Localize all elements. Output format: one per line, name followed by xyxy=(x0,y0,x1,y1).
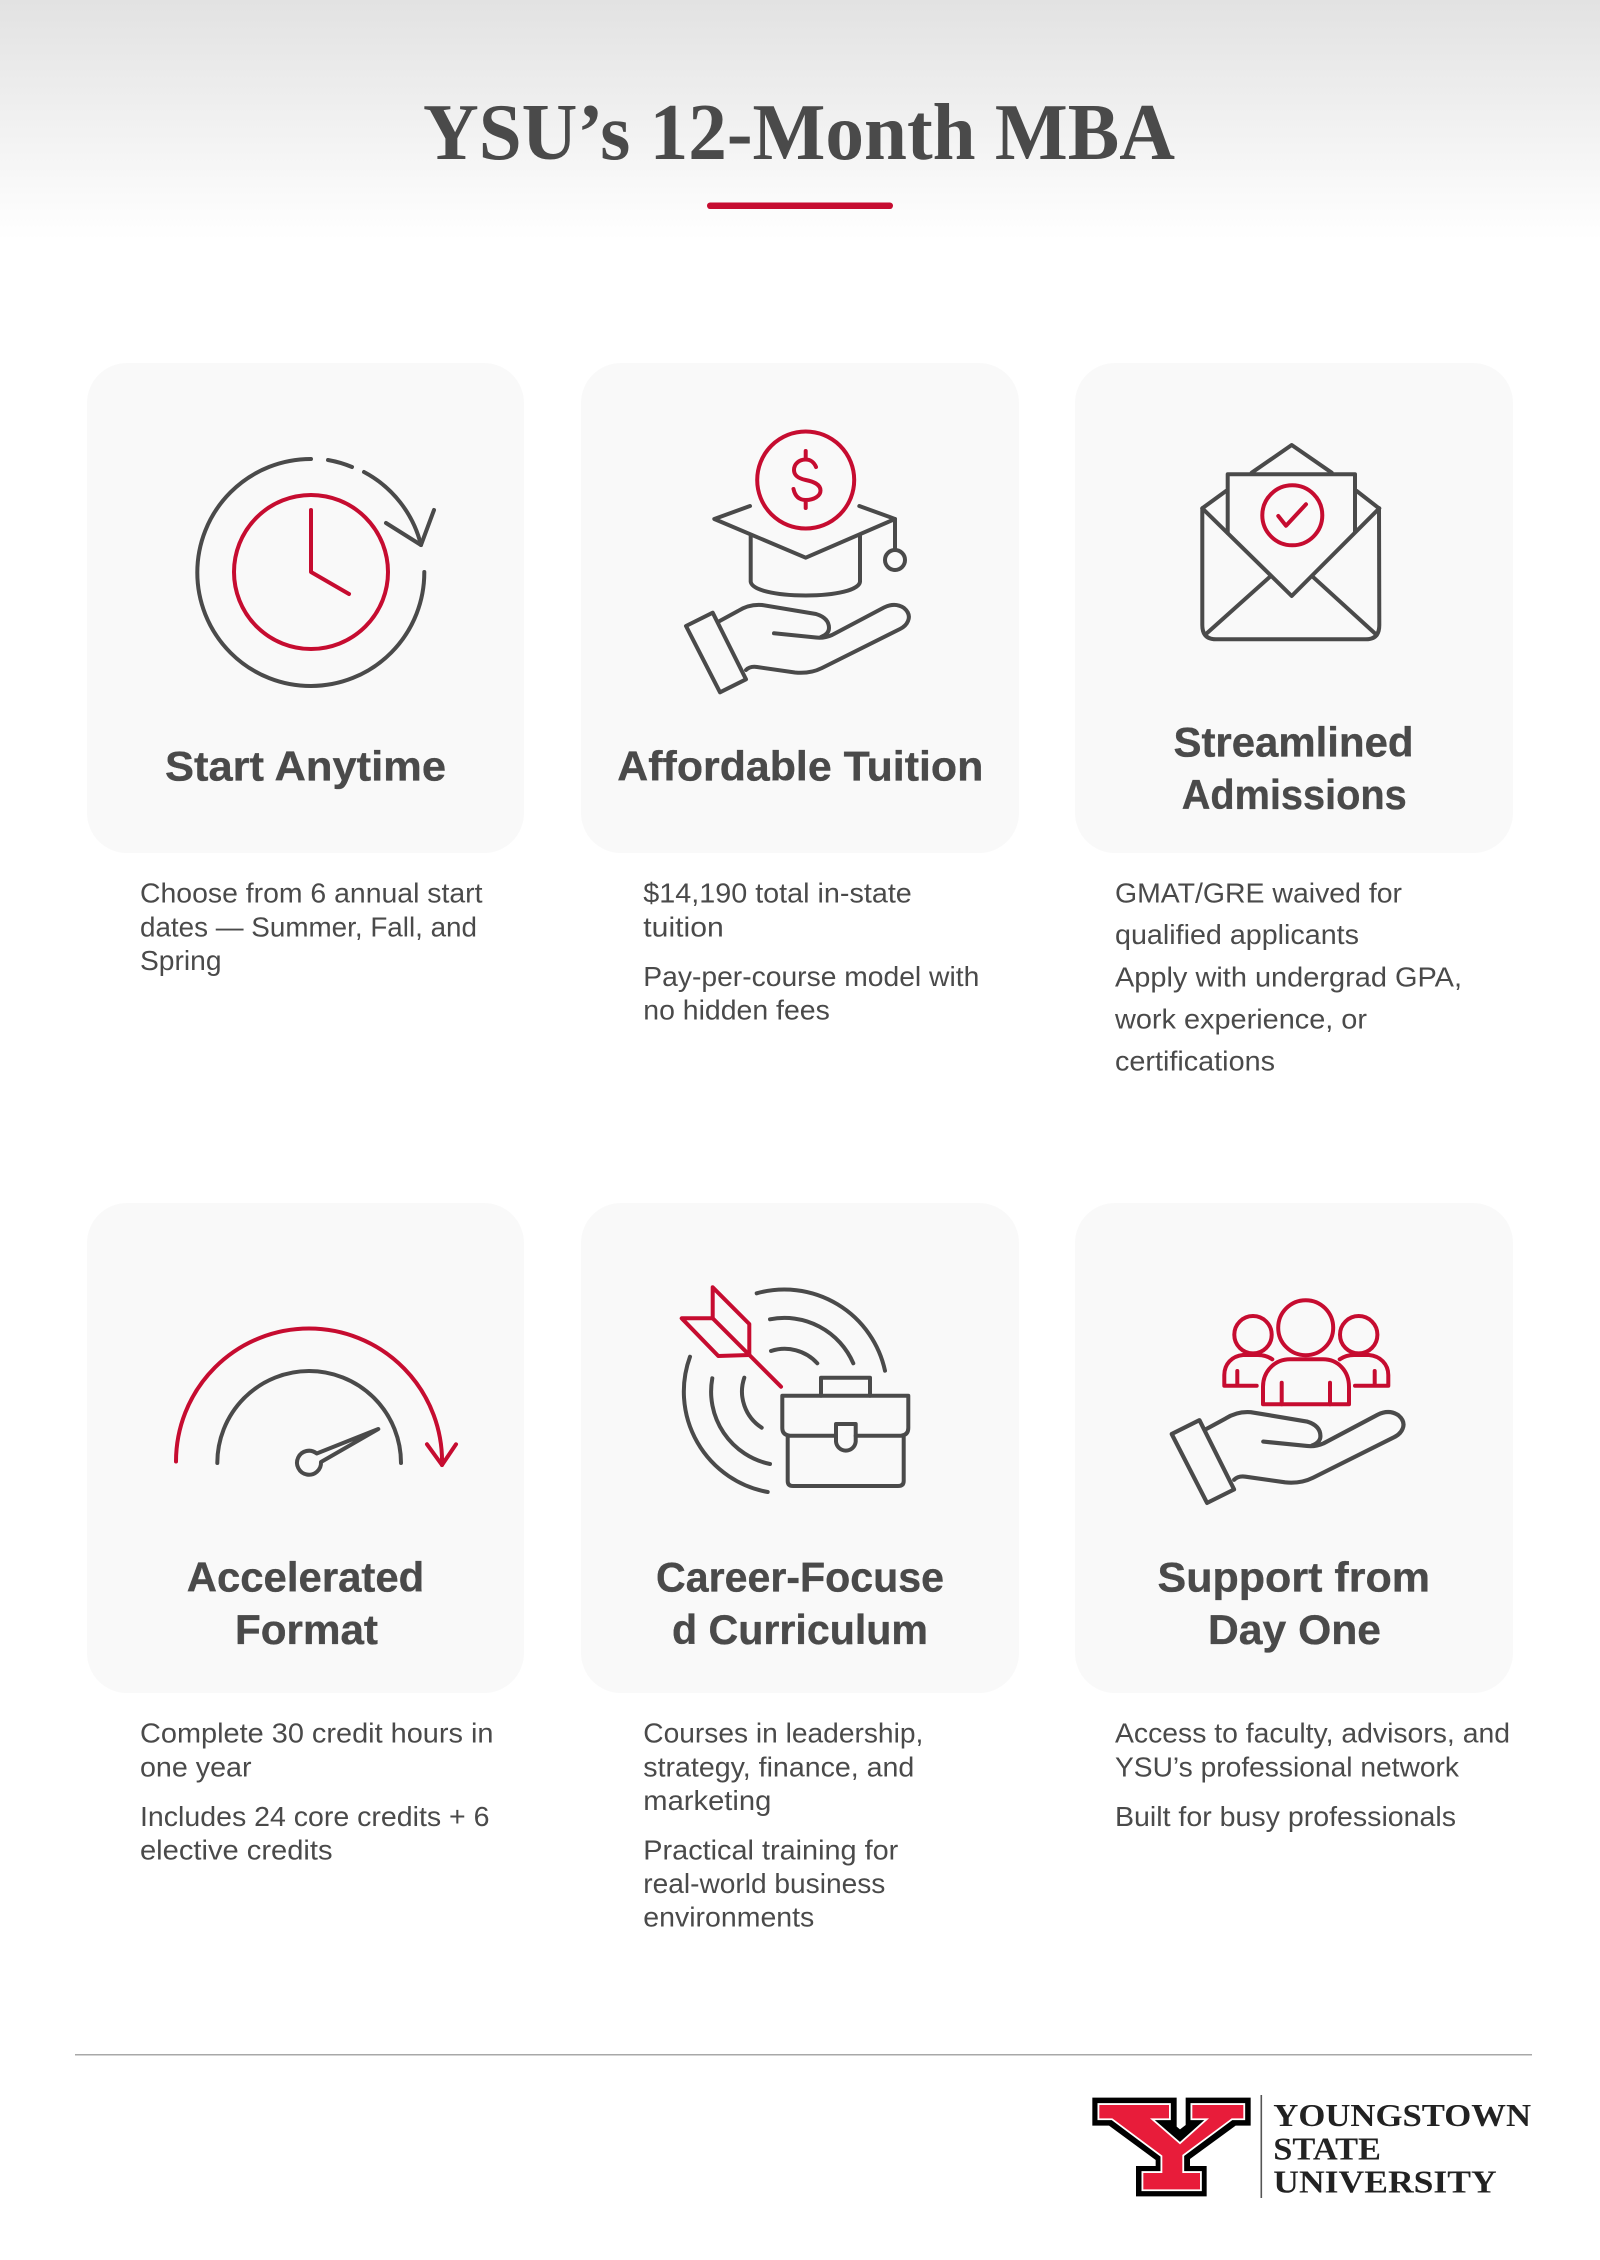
body text: strategy, finance, and xyxy=(643,1752,914,1783)
heading: Accelerated xyxy=(187,1554,424,1601)
heading: Format xyxy=(235,1606,378,1653)
panel: accelerated format xyxy=(87,1203,524,1866)
logo: Youngstown State University xyxy=(1092,2095,1531,2199)
body text: Courses in leadership, xyxy=(643,1718,923,1749)
body text xyxy=(140,878,483,976)
panel: support from day one xyxy=(1075,1203,1513,1832)
icon: dollar coin over graduation cap and hand xyxy=(686,432,909,692)
panel: streamlined admissions xyxy=(1075,363,1513,1077)
heading xyxy=(1158,1554,1430,1653)
body text: one year xyxy=(140,1752,252,1783)
body text: Practical training for xyxy=(643,1834,898,1866)
icon: people over a hand xyxy=(1172,1300,1404,1503)
logo wordmark: YOUNGSTOWN xyxy=(1273,2097,1531,2133)
body text xyxy=(643,878,979,1025)
body text: Built for busy professionals xyxy=(1115,1801,1456,1832)
card background xyxy=(1075,1203,1513,1693)
logo wordmark: STATE xyxy=(1273,2130,1381,2166)
body text: certifications xyxy=(1115,1046,1275,1077)
panel: affordable tuition xyxy=(581,363,1019,1025)
icon: clock with circular arrow xyxy=(197,459,434,686)
logo wordmark: UNIVERSITY xyxy=(1273,2163,1497,2199)
heading: Career-Focuse xyxy=(656,1554,944,1601)
body text: GMAT/GRE waived for xyxy=(1115,878,1402,909)
body text: tuition xyxy=(643,912,724,943)
body text: Spring xyxy=(140,945,222,976)
heading: Admissions xyxy=(1182,771,1407,818)
heading: d Curriculum xyxy=(672,1606,928,1653)
body text xyxy=(643,1718,923,1932)
body text: Pay-per-course model with xyxy=(643,961,979,992)
body text xyxy=(1115,1718,1510,1832)
icon: dart target and briefcase xyxy=(682,1287,908,1492)
card background xyxy=(1075,363,1513,853)
body text: qualified applicants xyxy=(1115,919,1359,950)
body text: dates — Summer, Fall, and xyxy=(140,912,477,943)
card background xyxy=(581,1203,1019,1693)
body text: Access to faculty, advisors, and xyxy=(1115,1718,1510,1749)
body text: Includes 24 core credits + 6 xyxy=(140,1801,490,1832)
body text: no hidden fees xyxy=(643,994,830,1025)
heading: Support from xyxy=(1158,1554,1430,1601)
body text: real-world business xyxy=(643,1868,885,1899)
heading xyxy=(187,1554,424,1653)
body text xyxy=(140,1718,494,1866)
heading: Start Anytime xyxy=(165,743,446,790)
body text: work experience, or xyxy=(1114,1003,1367,1034)
body text: Apply with undergrad GPA, xyxy=(1115,962,1462,993)
body text: marketing xyxy=(643,1785,771,1816)
logo wordmark xyxy=(1273,2097,1531,2199)
heading xyxy=(656,1554,944,1653)
panel: start anytime xyxy=(87,363,524,976)
logo mark: block Y xyxy=(1092,2098,1251,2196)
card background xyxy=(581,363,1019,853)
body text: elective credits xyxy=(140,1834,332,1866)
heading: Affordable Tuition xyxy=(617,743,983,790)
body text: YSU’s professional network xyxy=(1115,1752,1460,1783)
icon: open envelope with check mark xyxy=(1202,445,1379,639)
panel: career-focused curriculum xyxy=(581,1203,1019,1932)
heading: Streamlined xyxy=(1174,719,1414,766)
body text: Complete 30 credit hours in xyxy=(140,1718,494,1749)
card background xyxy=(87,363,524,853)
heading: Day One xyxy=(1208,1606,1381,1653)
title: YSU’s 12-Month MBA xyxy=(423,89,1175,177)
title underline xyxy=(707,202,893,209)
body text: $14,190 total in-state xyxy=(643,878,912,909)
icon: speedometer with arrow xyxy=(176,1328,456,1475)
body text xyxy=(1114,878,1462,1077)
body text: environments xyxy=(643,1902,814,1932)
heading xyxy=(1174,719,1414,818)
body text: Choose from 6 annual start xyxy=(140,878,483,909)
card background xyxy=(87,1203,524,1693)
